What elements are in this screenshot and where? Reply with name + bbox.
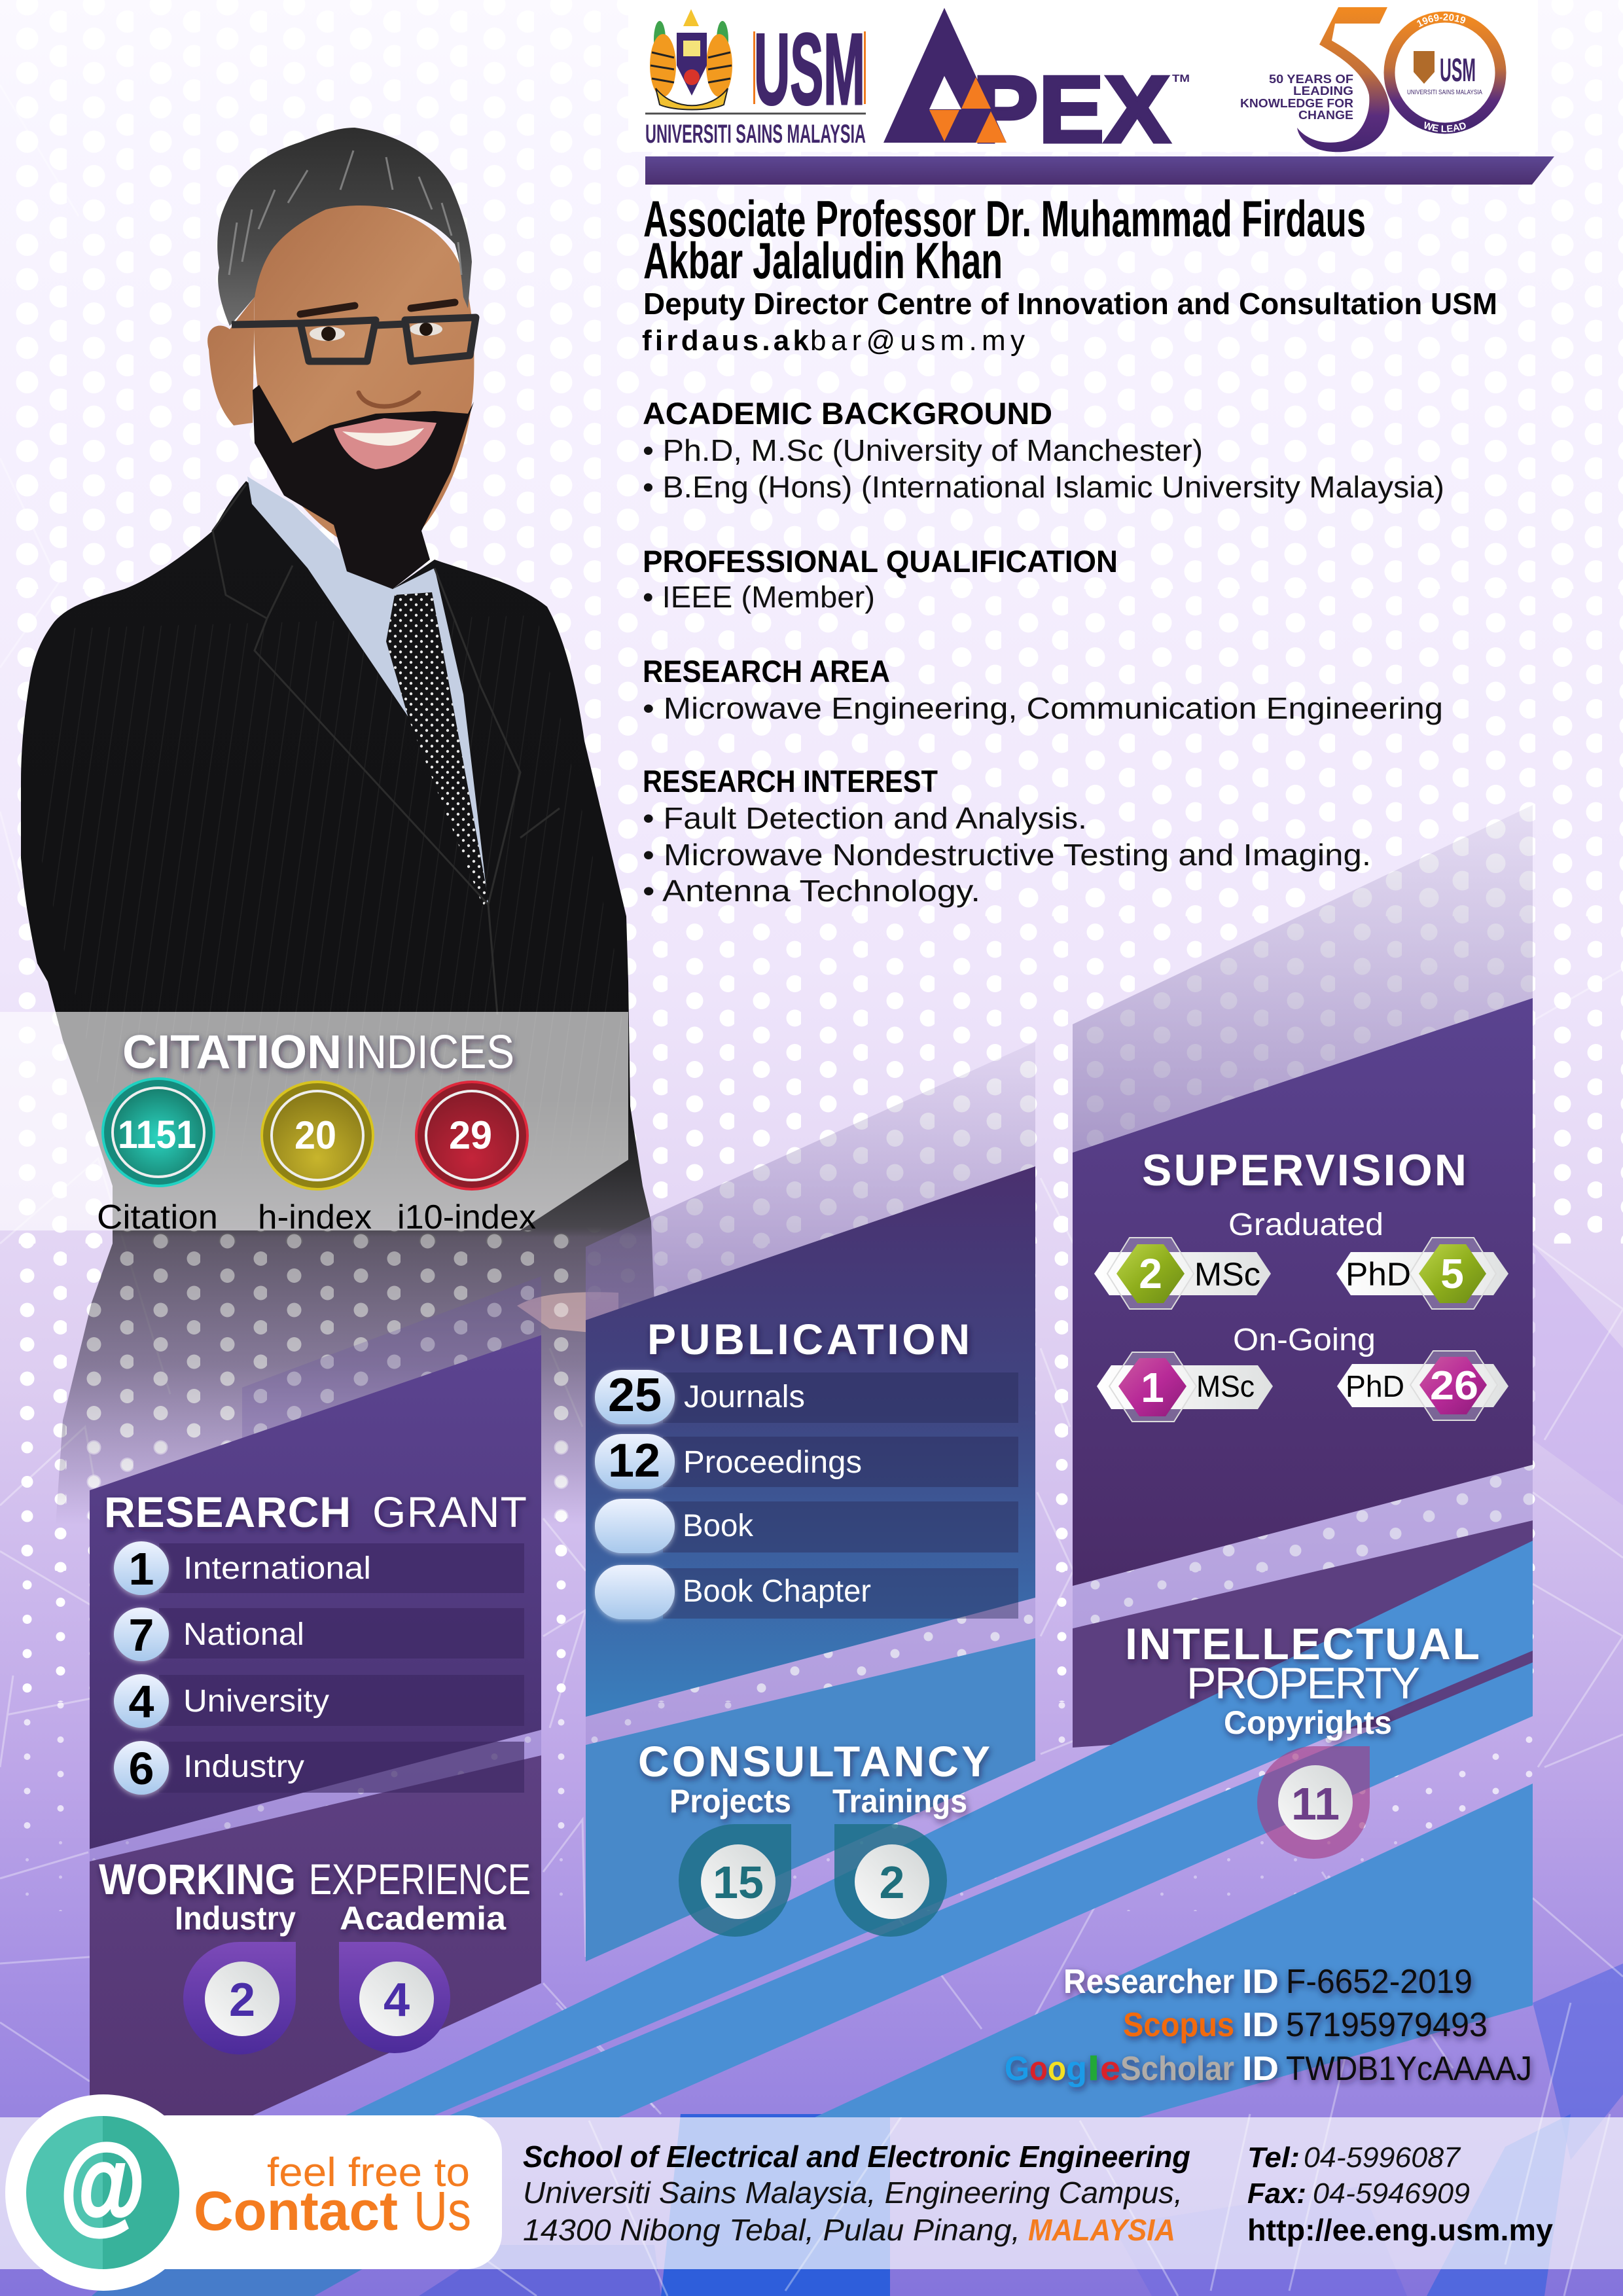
row: International: 1 <box>129 1543 154 1594</box>
on-going PhD: PhD <box>1346 1369 1404 1403</box>
row: International: International <box>183 1551 371 1586</box>
name heading <box>643 190 1366 289</box>
panel: research grant and working experience <box>90 1335 541 2117</box>
research area: RESEARCH AREA <box>643 654 890 689</box>
Google Scholar ID: G <box>1005 2050 1029 2088</box>
logo: 50 years anniversary: KNOWLEDGE FOR <box>1240 97 1353 110</box>
beard <box>253 385 474 589</box>
Google Scholar ID <box>1005 2050 1532 2088</box>
purple header bar <box>645 156 1554 185</box>
row: Book: Book <box>683 1509 754 1543</box>
logo: 50 years anniversary: LEADING <box>1293 84 1353 98</box>
citation labels: Citation <box>97 1198 218 1236</box>
Researcher ID: Researcher <box>1063 1963 1234 2001</box>
research grant title: GRANT <box>372 1488 527 1536</box>
research interest: RESEARCH INTEREST <box>643 764 938 798</box>
working experience title: WORKING <box>99 1855 296 1903</box>
graduated MSc: MSc <box>1194 1256 1260 1293</box>
icon: at sign: @ <box>60 2123 145 2243</box>
contact call to action: Contact <box>194 2180 398 2242</box>
badge: citation count <box>103 1079 214 1186</box>
mouth <box>334 418 437 469</box>
logo: APEX: PEX <box>972 56 1170 162</box>
on-going PhD: 26 <box>1430 1363 1478 1408</box>
citation labels <box>97 1198 536 1236</box>
badge: academia years <box>339 1942 450 2053</box>
citation labels: h-index <box>258 1198 372 1236</box>
email <box>642 325 1025 357</box>
row: Book Chapter: Book Chapter <box>683 1574 871 1609</box>
panel: citation indices <box>0 1012 628 1236</box>
graduated PhD <box>1336 1238 1508 1309</box>
Google Scholar ID: Scholar <box>1120 2050 1234 2088</box>
research interest: • Fault Detection and Analysis. <box>643 801 1087 835</box>
school address: Universiti Sains Malaysia, Engineering Campus, <box>523 2176 1183 2210</box>
school address: School of Electrical and Electronic Engineering <box>523 2140 1190 2174</box>
name heading: Akbar Jalaludin Khan <box>643 232 1003 289</box>
icon: at sign <box>26 2116 179 2269</box>
working experience labels: Industry <box>175 1900 296 1937</box>
blue diagonal ribbons <box>342 1541 1533 2117</box>
badge: copyrights: 11 <box>1291 1778 1340 1829</box>
intellectual property title: Copyrights <box>1224 1704 1392 1741</box>
supervision title: SUPERVISION <box>1142 1145 1467 1195</box>
university name: UNIVERSITI SAINS MALAYSIA <box>645 120 866 149</box>
research interest: • Antenna Technology. <box>643 874 980 908</box>
Scopus ID <box>1123 2006 1488 2044</box>
school address: MALAYSIA <box>1028 2213 1175 2247</box>
graduated PhD: PhD <box>1346 1256 1411 1293</box>
nose and brows <box>300 302 455 406</box>
contact call to action: Us <box>414 2180 471 2242</box>
row: Proceedings: 12 <box>608 1435 660 1487</box>
contact numbers and website: 04-5946909 <box>1313 2178 1470 2210</box>
graduated MSc: 2 <box>1139 1250 1162 1297</box>
Google Scholar ID: ID <box>1242 2050 1279 2088</box>
contact call to action: feel free to <box>267 2150 470 2195</box>
badge: copyrights <box>1257 1746 1370 1859</box>
graduated PhD: 5 <box>1440 1250 1464 1297</box>
badge: academia years: 4 <box>383 1974 410 2026</box>
Researcher ID <box>1063 1963 1472 2001</box>
white backing behind logos <box>628 0 1538 152</box>
on-going MSc: 1 <box>1141 1364 1164 1411</box>
consultancy labels: Trainings <box>832 1783 967 1820</box>
intellectual property title <box>1125 1619 1480 1741</box>
badge: trainings <box>834 1824 947 1937</box>
consultancy title: CONSULTANCY <box>638 1737 990 1785</box>
research grant title: RESEARCH <box>104 1488 351 1536</box>
Google Scholar ID: g <box>1066 2050 1087 2088</box>
email: bar@usm.my <box>810 325 1025 357</box>
professional qualification: PROFESSIONAL QUALIFICATION <box>643 544 1118 579</box>
contact call to action <box>194 2150 471 2242</box>
row: University: 4 <box>129 1676 154 1727</box>
row: Industry: Industry <box>183 1749 304 1784</box>
contact numbers and website: Tel: <box>1247 2142 1300 2174</box>
email: firdaus.ak <box>642 325 810 357</box>
consultancy labels <box>669 1783 967 1820</box>
graduated label: Graduated <box>1228 1208 1383 1242</box>
logo: 50 years anniversary: CHANGE <box>1298 109 1353 122</box>
Researcher ID: F-6652-2019 <box>1286 1963 1472 2001</box>
hair <box>217 128 472 326</box>
citation title <box>122 1026 514 1079</box>
research area <box>643 654 1443 725</box>
head <box>207 202 474 553</box>
row: Journals <box>595 1369 1018 1424</box>
panel: intellectual property <box>1125 1619 1480 1859</box>
Google Scholar ID: l <box>1087 2050 1100 2088</box>
Researcher ID: ID <box>1242 1963 1279 2001</box>
Scopus ID: 57195979493 <box>1286 2006 1488 2044</box>
contact numbers and website: http://ee.eng.usm.my <box>1247 2213 1553 2247</box>
research grant title <box>104 1488 527 1536</box>
consultancy labels: Projects <box>669 1783 791 1820</box>
contact numbers and website <box>1247 2142 1553 2247</box>
working experience title <box>99 1855 531 1903</box>
logo: 50 years anniversary: UNIVERSITI SAINS MALAYSIA <box>1407 89 1482 96</box>
row: Proceedings: Proceedings <box>683 1445 862 1480</box>
academic background: • Ph.D, M.Sc (University of Manchester) <box>643 433 1203 467</box>
Scopus ID: Scopus <box>1123 2006 1234 2044</box>
badge: industry years: 2 <box>229 1974 255 2026</box>
Google Scholar ID: o <box>1048 2050 1066 2088</box>
row: Journals: Journals <box>684 1380 805 1414</box>
USM wordmark <box>753 31 755 104</box>
Scopus ID: ID <box>1242 2006 1279 2044</box>
panel: publication content <box>595 1315 1018 1619</box>
row: National <box>114 1607 524 1661</box>
panel: publication background <box>586 1166 1035 1962</box>
badge: h-index <box>262 1082 373 1189</box>
suit jacket <box>21 481 654 1525</box>
contact numbers and website: 04-5996087 <box>1304 2142 1461 2174</box>
publication title: PUBLICATION <box>647 1315 970 1363</box>
eyes <box>310 323 442 341</box>
infographic canvas: USM <box>754 12 865 126</box>
research area: • Microwave Engineering, Communication Engineering <box>643 691 1443 725</box>
school address <box>523 2140 1190 2247</box>
badge: h-index: 20 <box>294 1113 336 1157</box>
logo: 50 years anniversary <box>1240 7 1507 152</box>
row: Proceedings <box>595 1434 1018 1489</box>
professional qualification: • IEEE (Member) <box>643 580 875 614</box>
badge: projects: 15 <box>713 1857 764 1908</box>
logo: 50 years anniversary: 1969-2019 <box>1417 13 1466 27</box>
badge: projects <box>679 1824 791 1937</box>
translucent panel trails <box>90 805 1533 1861</box>
panel: consultancy <box>638 1737 990 1937</box>
badge: citation count: 1151 <box>118 1113 196 1157</box>
researcher IDs <box>1005 1963 1532 2088</box>
badge: industry years <box>183 1942 296 2054</box>
research interest <box>643 764 1371 908</box>
row: National: 7 <box>129 1609 154 1660</box>
on-going label: On-Going <box>1233 1323 1376 1357</box>
row: Book <box>595 1499 1018 1553</box>
badge: i10-index <box>416 1082 527 1189</box>
Google Scholar ID: o <box>1029 2050 1048 2088</box>
logo: 50 years anniversary: WE LEAD <box>1424 122 1466 132</box>
academic background: • B.Eng (Hons) (International Islamic University Malaysia) <box>643 470 1444 504</box>
panel: supervision content <box>1094 1145 1508 1422</box>
working experience labels <box>175 1900 507 1937</box>
contact numbers and website: Fax: <box>1247 2178 1306 2210</box>
academic background <box>643 396 1444 504</box>
research interest: • Microwave Nondestructive Testing and Imaging. <box>643 838 1371 872</box>
badge: trainings: 2 <box>880 1857 904 1908</box>
row: National: National <box>183 1617 304 1652</box>
school address: 14300 Nibong Tebal, Pulau Pinang, <box>523 2213 1020 2247</box>
logo: APEX: TM <box>1172 73 1190 84</box>
glasses <box>232 317 476 361</box>
logo: 50 years anniversary: USM <box>1440 52 1476 88</box>
logo: USM crest and wordmark <box>645 9 866 149</box>
hand <box>517 1292 618 1335</box>
logo: 50 years anniversary: 50 YEARS OF <box>1269 73 1353 86</box>
row: Industry <box>114 1741 524 1795</box>
on-going MSc <box>1097 1352 1273 1422</box>
academic background: ACADEMIC BACKGROUND <box>643 396 1052 431</box>
working experience title: EXPERIENCE <box>309 1855 531 1903</box>
on-going PhD <box>1337 1351 1508 1420</box>
panel: supervision background <box>1073 998 1533 1748</box>
on-going MSc: MSc <box>1196 1369 1255 1403</box>
row: International <box>114 1541 524 1595</box>
logo: APEX <box>883 8 1190 162</box>
row: University <box>114 1674 524 1728</box>
intellectual property title: INTELLECTUAL <box>1125 1619 1480 1669</box>
intellectual property title: PROPERTY <box>1186 1659 1420 1708</box>
row: Journals: 25 <box>608 1369 662 1422</box>
portrait photo of Dr. Firdaus <box>21 128 654 1525</box>
crest <box>650 9 732 110</box>
row: Book Chapter <box>595 1565 1018 1619</box>
working experience labels: Academia <box>340 1900 507 1937</box>
row: University: University <box>183 1684 329 1719</box>
citation labels: i10-index <box>397 1198 536 1236</box>
citation title: INDICES <box>345 1026 514 1079</box>
footer translucent band <box>0 2117 1623 2269</box>
badge: i10-index: 29 <box>449 1113 492 1157</box>
Google Scholar ID: TWDB1YcAAAAJ <box>1286 2050 1532 2088</box>
graduated MSc <box>1094 1238 1271 1309</box>
contact pill <box>5 2094 502 2291</box>
Google Scholar ID: e <box>1100 2050 1120 2088</box>
professional qualification <box>643 544 1118 614</box>
row: Industry: 6 <box>129 1743 154 1794</box>
citation title: CITATION <box>122 1026 342 1079</box>
job title: Deputy Director Centre of Innovation and Consultation USM <box>643 287 1497 321</box>
